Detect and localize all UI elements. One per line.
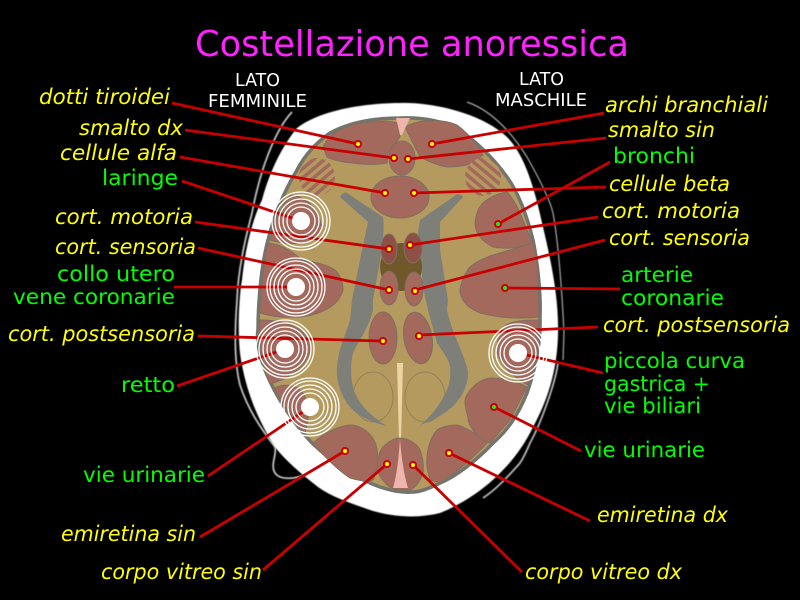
heading: lato maschile [495, 69, 587, 111]
right labels: arterie [621, 263, 693, 287]
right labels: vie biliari [604, 394, 701, 418]
left labels: vene coronarie [13, 285, 175, 309]
heading: lato femminile: LATO [235, 70, 280, 91]
lobes lateral left [259, 195, 343, 433]
ventricle right [418, 194, 468, 425]
heading: lato maschile: LATO [519, 69, 564, 90]
left labels: cort. sensoria [55, 235, 196, 259]
left labels: emiretina sin [61, 522, 196, 546]
left labels: laringe [102, 166, 178, 190]
right labels [525, 93, 790, 584]
heading: lato femminile: FEMMINILE [208, 91, 307, 112]
right labels: cellule beta [609, 172, 730, 196]
left labels: corpo vitreo sin [101, 560, 262, 584]
left labels: retto [121, 373, 175, 397]
target rings: laringe [272, 192, 330, 250]
left labels: cellule alfa [60, 141, 177, 165]
left labels: cort. motoria [55, 205, 193, 229]
right labels: archi branchiali [605, 93, 768, 117]
target rings: retto [256, 320, 314, 378]
skull [239, 103, 558, 516]
thalamus outlines [353, 372, 445, 422]
lobes lateral right [460, 192, 539, 443]
left labels: smalto dx [79, 116, 184, 140]
right labels: smalto sin [608, 118, 715, 142]
right labels: cort. sensoria [609, 226, 750, 250]
right labels: piccola curva [604, 349, 745, 373]
target rings: piccola curva gastrica [489, 324, 547, 382]
target rings: collo utero / vene coronarie [267, 258, 325, 316]
target rings: vie urinarie [281, 378, 339, 436]
right labels: bronchi [613, 144, 695, 168]
heading: lato femminile [208, 70, 307, 112]
right labels: vie urinarie [584, 438, 705, 462]
right labels: coronarie [621, 286, 724, 310]
head skin outline [235, 102, 564, 498]
right labels: cort. motoria [602, 199, 740, 223]
heading: lato maschile: MASCHILE [495, 90, 587, 111]
brain CT scan [235, 102, 564, 516]
left labels [8, 85, 262, 584]
midline [397, 363, 403, 440]
lobes central [369, 233, 436, 366]
brain tissue [257, 118, 540, 492]
right labels: cort. postsensoria [603, 313, 790, 337]
connector lines [172, 103, 620, 572]
left labels: vie urinarie [83, 463, 205, 487]
ventricle left [337, 193, 387, 426]
lobes frontal [299, 121, 501, 218]
marker dots [342, 141, 508, 468]
right labels: gastrica + [604, 372, 710, 396]
right labels: emiretina dx [597, 503, 729, 527]
title: Costellazione anoressica [195, 24, 629, 65]
right labels: corpo vitreo dx [525, 560, 683, 584]
left labels: dotti tiroidei [39, 85, 170, 109]
left labels: cort. postsensoria [8, 322, 195, 346]
lobes posterior [313, 118, 487, 490]
left labels: collo utero [57, 262, 175, 286]
